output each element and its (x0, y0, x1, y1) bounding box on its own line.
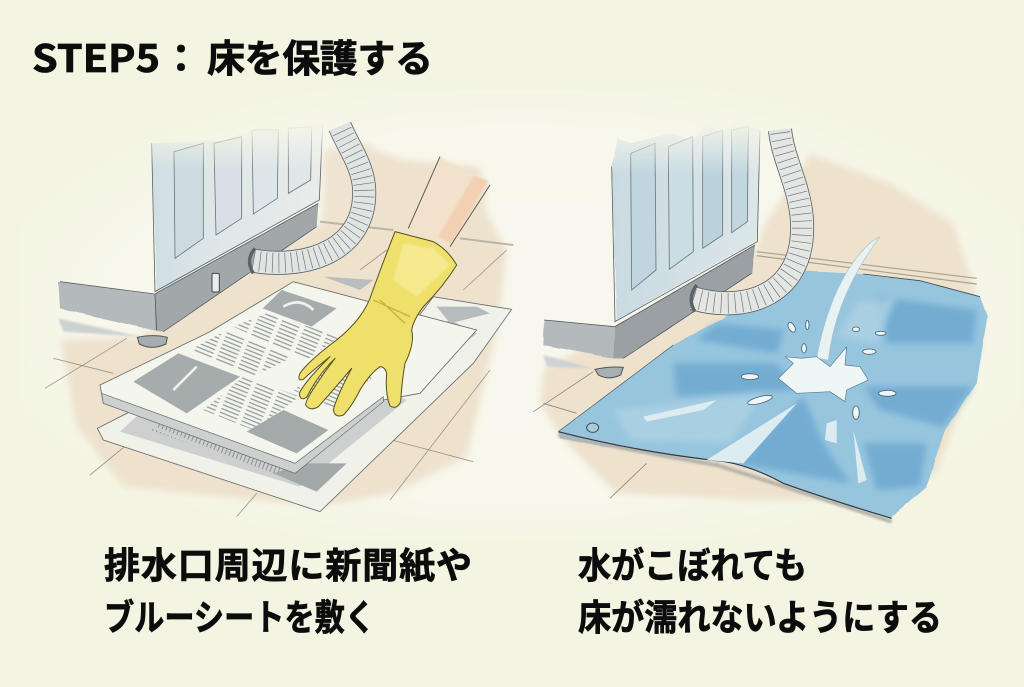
blue sheet (558, 270, 987, 522)
caption: right line 2: 床が濡れないようにする (578, 597, 942, 638)
caption: left line 2: ブルーシートを敷く (104, 597, 375, 638)
washing machine body (152, 122, 323, 293)
washing machine base (543, 245, 755, 378)
floor and wall wash (60, 143, 507, 507)
title: ： (162, 28, 200, 83)
floor and wall wash (540, 153, 983, 500)
title (32, 28, 433, 83)
title: STEP5 (32, 28, 160, 83)
caption: left line 1: 排水口周辺に新聞紙や (104, 545, 472, 586)
panel: newspaper illustration (45, 122, 513, 517)
water stream and splash (741, 237, 896, 419)
floor tile lines (45, 222, 513, 517)
title: 床を保護する (207, 28, 433, 83)
drain hose (691, 130, 802, 312)
drain hose (250, 127, 364, 273)
caption: right line 1: 水がこぼれても (578, 545, 807, 586)
floor tile lines (533, 252, 977, 498)
yellow rubber glove (299, 232, 457, 416)
lower newspaper (97, 277, 512, 512)
washing machine body (612, 122, 760, 322)
arm (408, 157, 490, 247)
upper newspaper (100, 282, 477, 473)
washing machine base (58, 203, 318, 347)
panel: blue sheet illustration (533, 122, 987, 522)
